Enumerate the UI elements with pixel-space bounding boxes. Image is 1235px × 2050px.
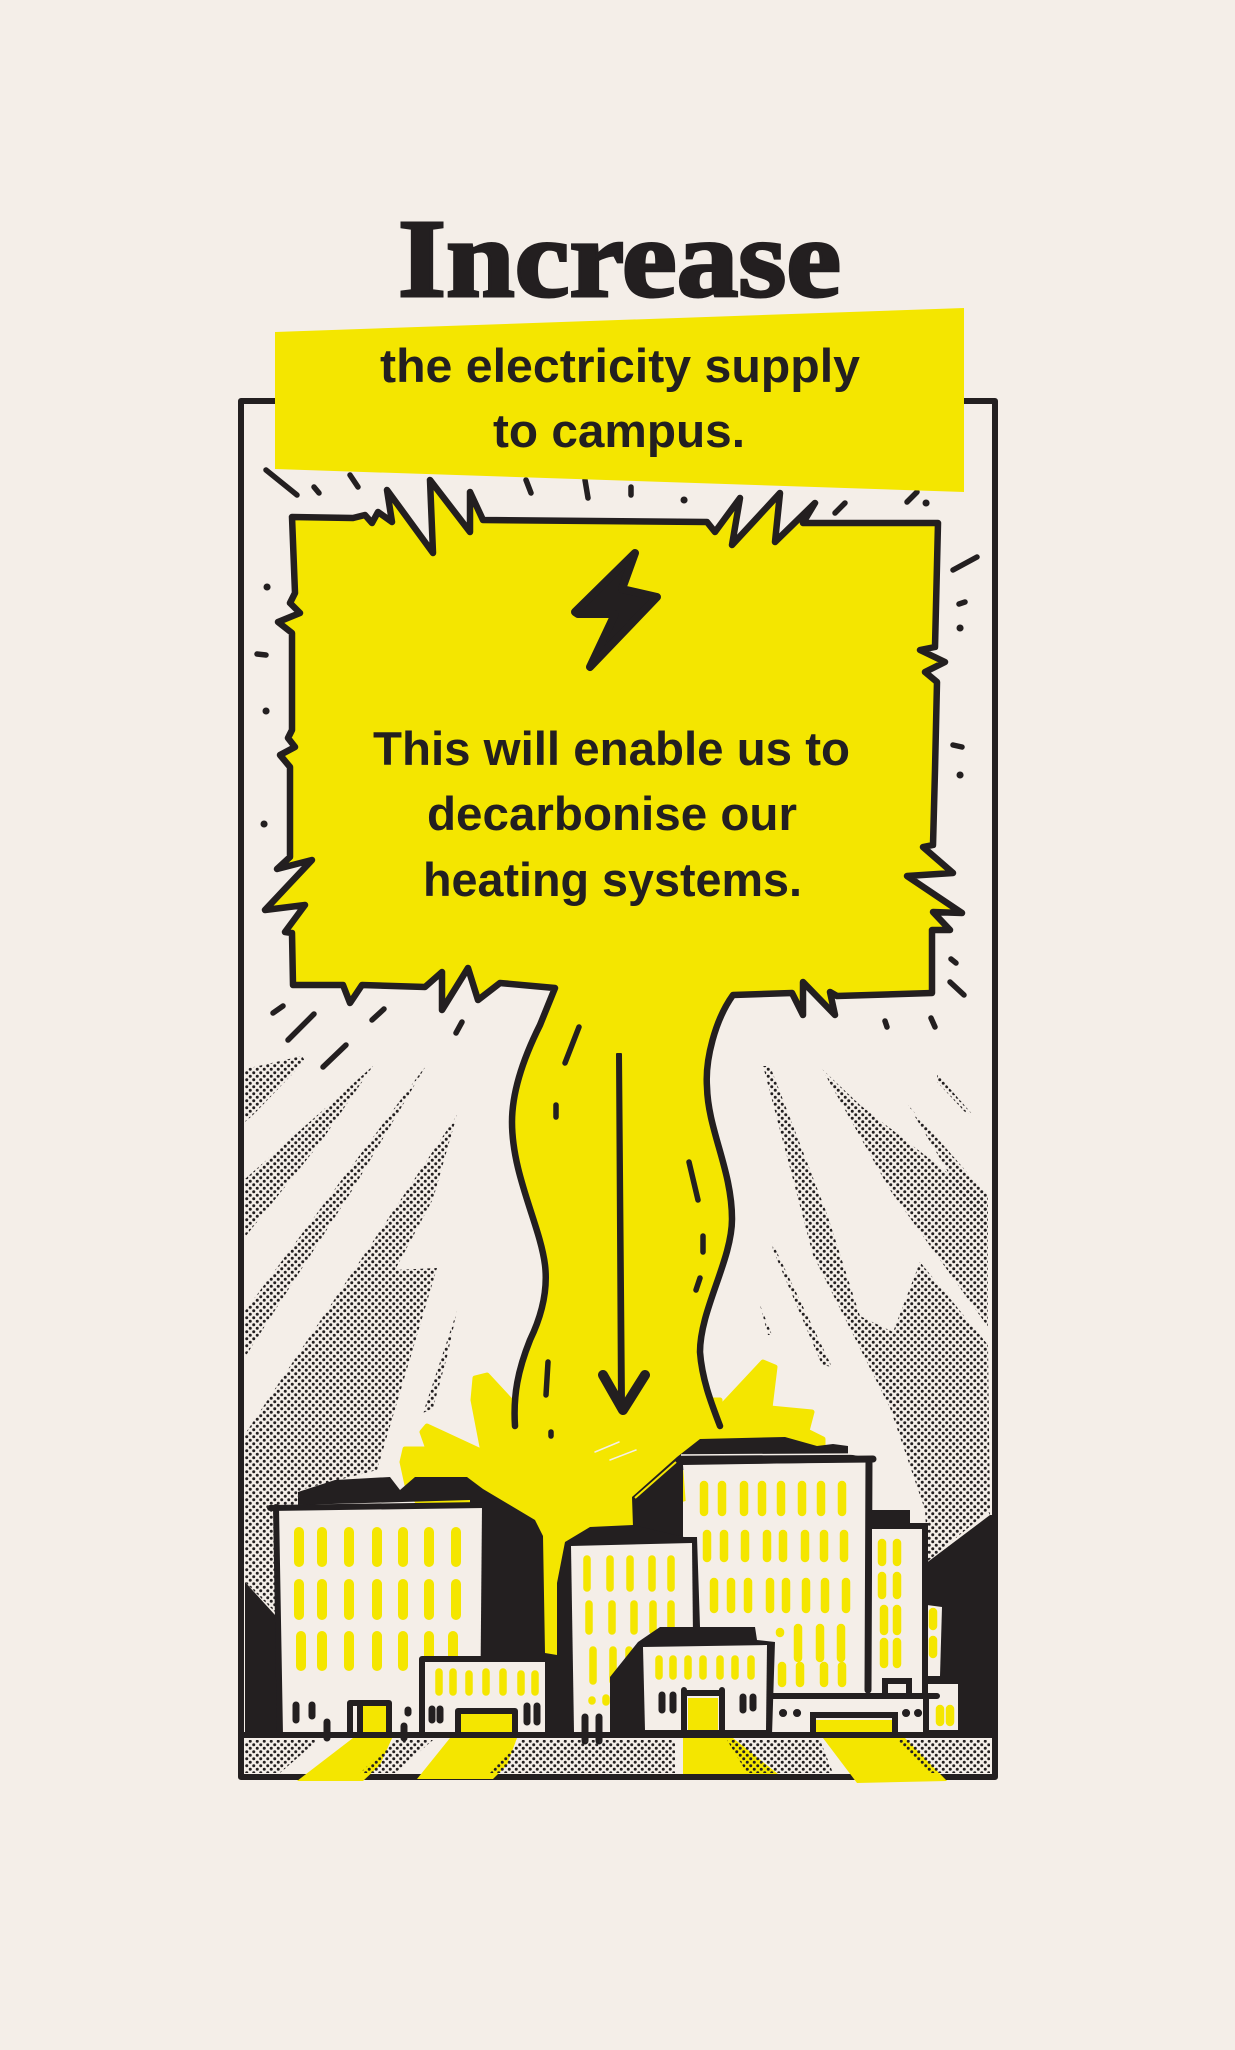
main tower windows [704, 1485, 846, 1683]
title: Increase [398, 198, 841, 321]
left building side and roof [298, 1477, 557, 1735]
icon: yellow glow burst behind buildings [402, 1362, 823, 1700]
subtitle: to campus. [493, 404, 745, 457]
low right building [772, 1696, 928, 1732]
left low building [422, 1659, 548, 1735]
ground light beams [297, 1736, 947, 1783]
panel: yellow box with stem [265, 480, 962, 1426]
body text: heating systems. [423, 853, 802, 906]
spark dashes around box [257, 470, 977, 1436]
front small building [610, 1627, 775, 1735]
icon: lightning bolt [575, 553, 657, 667]
subtitle [380, 339, 860, 457]
left building face [277, 1505, 482, 1735]
halftone light rays [245, 1056, 990, 1612]
banner: yellow ribbon [275, 308, 964, 492]
body text [373, 722, 850, 906]
arrow: down [595, 1054, 645, 1460]
subtitle: the electricity supply [380, 339, 860, 392]
middle building [557, 1525, 700, 1735]
left building door and ticks [362, 1706, 388, 1735]
ground line [243, 1732, 995, 1738]
buildings: city block [245, 1437, 998, 1741]
far left dark wedge [245, 1582, 285, 1735]
main tower dark side and roof [632, 1437, 873, 1537]
frame [241, 401, 995, 1777]
far right dark wedge [925, 1515, 998, 1735]
main tower face [683, 1462, 868, 1696]
left building windows [299, 1532, 456, 1666]
body text: This will enable us to [373, 722, 850, 775]
halftone ground strip [245, 1740, 990, 1773]
far right small buildings [927, 1605, 958, 1730]
body text: decarbonise our [427, 787, 797, 840]
right tower [872, 1510, 925, 1530]
